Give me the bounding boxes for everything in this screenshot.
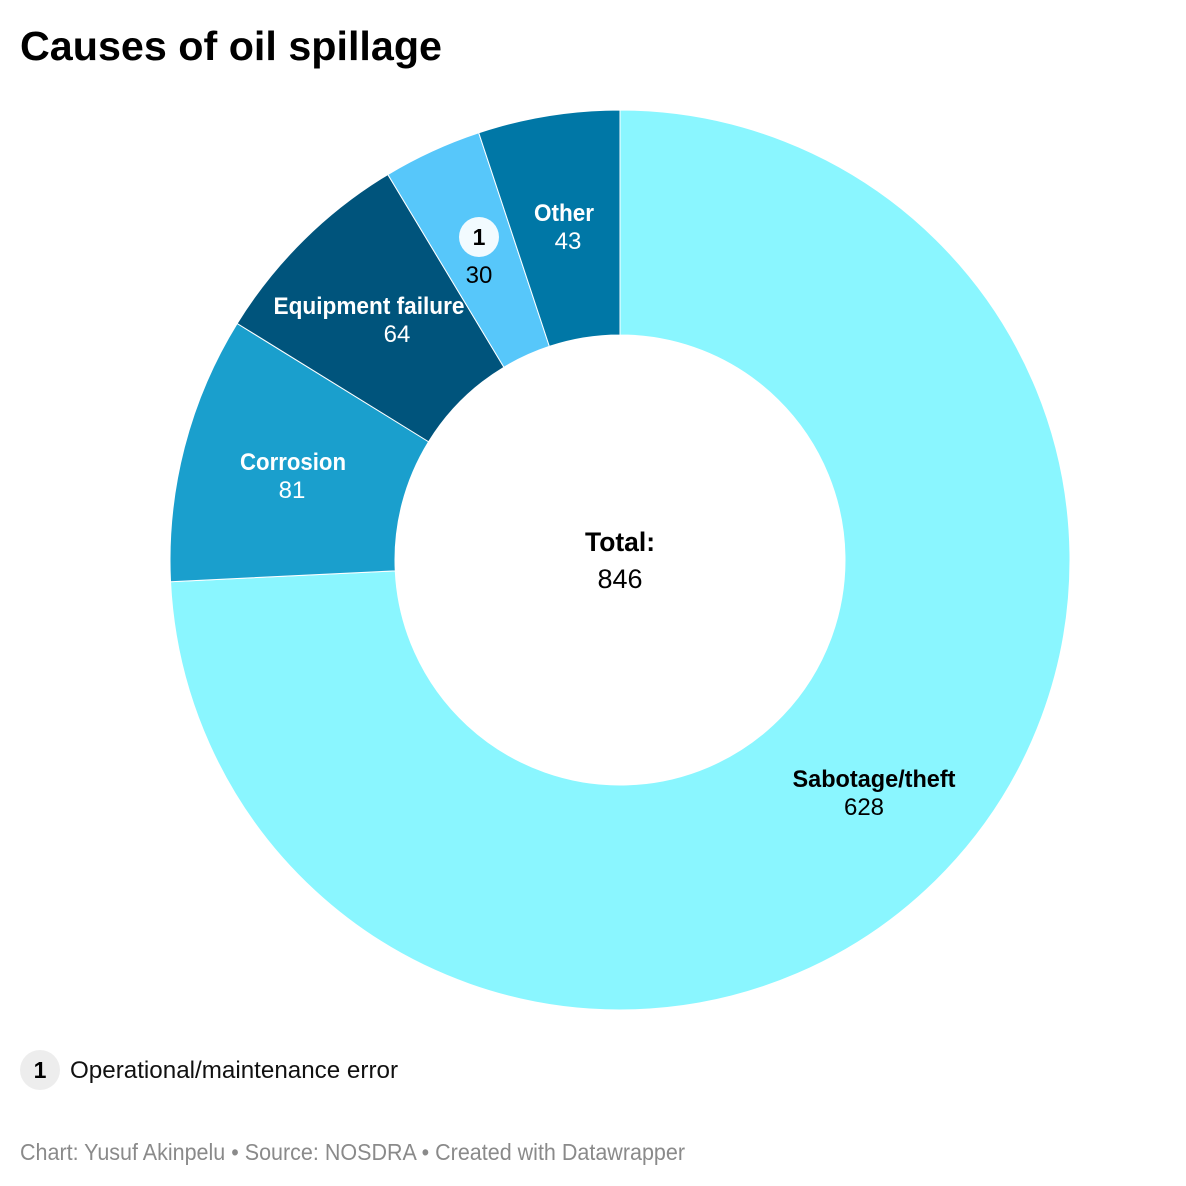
label: Equipment failure (274, 293, 464, 348)
legend note (20, 1050, 398, 1090)
center total: Total: (585, 527, 655, 557)
segment: Equipment failure (237, 175, 504, 442)
label: Equipment failure: Equipment failure (274, 293, 464, 320)
label: Other: Other (534, 200, 594, 227)
legend note: 1 (34, 1057, 47, 1083)
footer credit: Chart: Yusuf Akinpelu • Source: NOSDRA • Created with Datawrapper (20, 1139, 685, 1165)
label: Sabotage/theft (792, 766, 956, 821)
label: Sabotage/theft: Sabotage/theft (792, 766, 956, 793)
label: marker 1 with value 30: 30 (466, 262, 492, 289)
center total: 846 (597, 564, 643, 594)
donut chart (170, 110, 1070, 1010)
segment: Sabotage/theft (171, 110, 1070, 1010)
label: marker 1 with value 30 (459, 217, 499, 289)
segment: Corrosion (170, 323, 429, 582)
label: Corrosion (240, 449, 346, 504)
label: Other: 43 (555, 228, 581, 255)
label: marker 1 with value 30: 1 (473, 224, 486, 250)
center total (585, 527, 655, 594)
title: Causes of oil spillage (20, 23, 442, 69)
segment: Operational/maintenance error (388, 133, 549, 367)
label: Sabotage/theft: 628 (844, 794, 884, 821)
label: Other (534, 200, 594, 255)
label: Corrosion: 81 (279, 477, 305, 504)
segment: Other (479, 110, 620, 346)
label: Corrosion: Corrosion (240, 449, 346, 476)
label: Equipment failure: 64 (384, 321, 410, 348)
legend note: Operational/maintenance error (70, 1057, 398, 1084)
